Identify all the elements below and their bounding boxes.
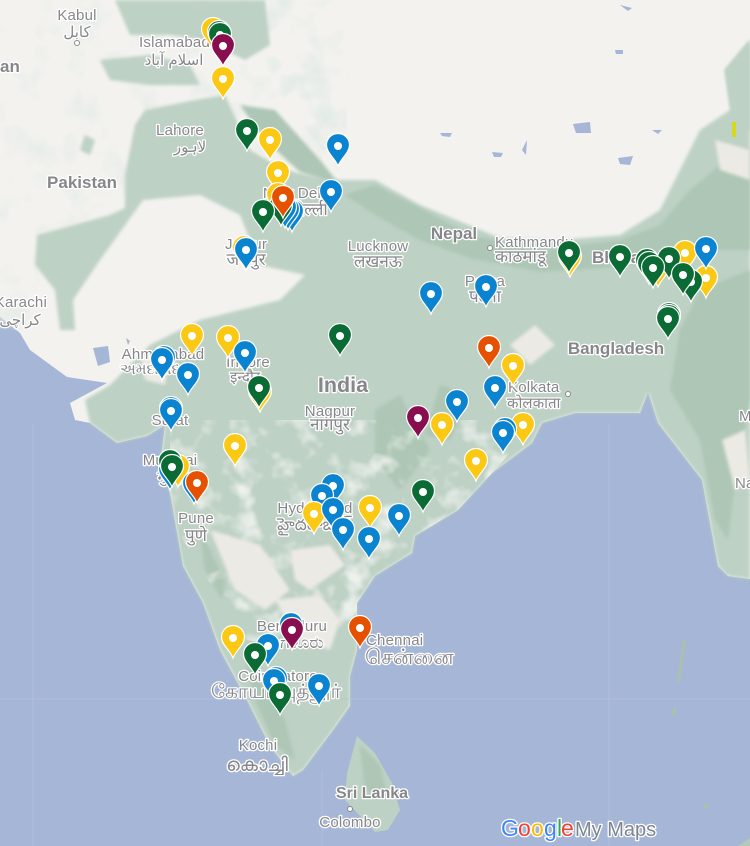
logo: Google My Maps: G	[501, 815, 519, 841]
place labels: नागपुर	[310, 415, 351, 435]
place labels: અમદાવાદ	[120, 361, 180, 378]
place labels: जयपुर	[226, 250, 267, 270]
place labels: சென்னை	[365, 646, 454, 669]
place labels: Bangladesh	[568, 339, 664, 358]
marker: small yellow patch	[732, 122, 736, 137]
land: textured kashmir hills	[274, 0, 346, 128]
pins: Hyderabad and east coast	[302, 274, 534, 559]
place labels: Colombo	[319, 814, 381, 831]
place labels: India	[318, 373, 369, 397]
place labels: கோயம்புத்தூர்	[211, 681, 342, 704]
place labels: Kathmandu	[495, 234, 574, 251]
place labels: Mumbai	[143, 452, 197, 469]
land: Sri Lanka	[345, 736, 400, 832]
pins: north India and Delhi	[232, 118, 350, 270]
place labels: Coimbatore	[238, 668, 318, 685]
place labels: Nepal	[431, 224, 477, 243]
pins: north-east India	[558, 236, 718, 339]
land: northern hills patches	[80, 0, 750, 155]
place labels: Islamabad	[139, 34, 210, 51]
land: textured western hills	[0, 10, 313, 330]
place labels: Sri Lanka	[336, 785, 408, 802]
map tile seams	[0, 423, 750, 846]
place labels: काठमांडू	[495, 247, 548, 267]
place labels: Jaipur	[225, 236, 267, 253]
pins: Mumbai and Pune	[158, 450, 208, 504]
place labels: హైదరాబాద్	[276, 515, 353, 536]
place labels: Kochi	[239, 737, 277, 754]
logo: Google My Maps: e	[561, 815, 574, 841]
logo: Google My Maps: o	[518, 815, 531, 841]
place labels: कोलकाता	[507, 394, 562, 412]
pins: Kashmir	[202, 18, 234, 99]
logo: Google My Maps: o	[531, 815, 544, 841]
place labels: കൊച്ചി	[226, 755, 288, 776]
place labels: Patna	[465, 273, 506, 290]
place labels: Bengaluru	[257, 618, 327, 635]
place labels: كراچى	[0, 312, 42, 329]
place labels: Kabul	[57, 7, 97, 24]
place labels: کابل	[63, 24, 91, 41]
land corner bottom right	[738, 838, 750, 846]
place labels: लखनऊ	[354, 252, 403, 271]
land: light plateau patches	[170, 420, 508, 642]
logo: Google My Maps	[501, 815, 656, 841]
place labels: Ahmedabad	[122, 346, 204, 363]
pins: south India	[222, 612, 372, 715]
place labels: Lahore	[156, 122, 204, 139]
place labels: Hyderabad	[277, 500, 353, 517]
logo: Google My Maps: g	[544, 815, 557, 841]
lakes	[93, 5, 662, 366]
logo: Google My Maps: l	[557, 815, 562, 841]
place labels: नई दिल्ली	[268, 199, 328, 219]
place labels: اسلام آباد	[145, 51, 203, 69]
place labels: an	[0, 57, 20, 76]
land: darker mountain foothills	[200, 105, 750, 800]
place labels: ಬೆಂಗಳೂರು	[260, 633, 324, 652]
place labels: Indore	[226, 354, 270, 371]
place labels: Nagpur	[305, 403, 355, 420]
pins: west and central India	[150, 324, 352, 466]
place labels: Pune	[178, 510, 214, 527]
place labels: لاہور	[173, 139, 206, 156]
place labels: Surat	[152, 412, 189, 429]
place labels: पुणे	[185, 525, 208, 546]
andaman islands	[672, 640, 708, 808]
place labels: Bhutan	[592, 248, 651, 267]
place labels: Chennai	[366, 632, 423, 649]
place labels: इन्दौर	[230, 368, 261, 386]
place labels: Kolkata	[508, 379, 560, 396]
place labels: Lucknow	[348, 238, 408, 255]
place labels: Pakistan	[47, 173, 117, 192]
logo: Google My Maps: My Maps	[575, 819, 656, 841]
place labels: पटना	[469, 287, 502, 306]
place labels: New Delhi	[263, 185, 333, 202]
place labels: मुंबई	[158, 468, 183, 487]
